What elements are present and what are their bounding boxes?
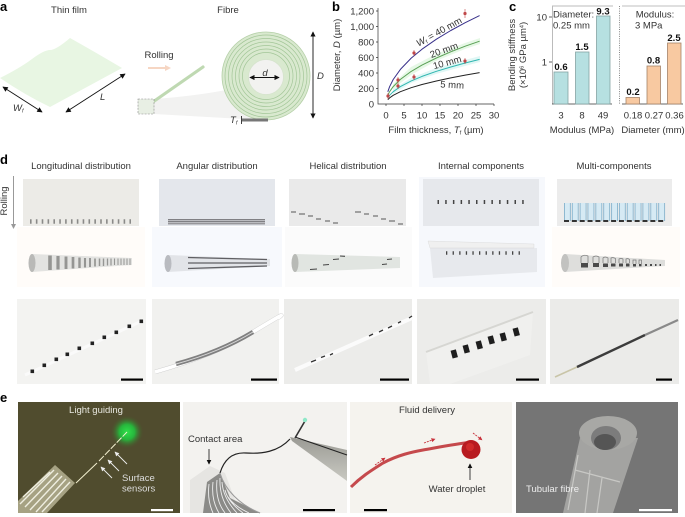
note: modulus: Modulus: [636, 10, 674, 20]
note: modulus: 3 MPa [635, 20, 663, 32]
teal x labels: 49 [598, 110, 608, 122]
rolling direction arrow [0, 176, 16, 229]
y ticks: 1 [542, 57, 547, 68]
column headings: Internal components [438, 161, 524, 172]
data markers [387, 9, 466, 99]
curve: 5 mm [388, 73, 480, 100]
x axis tick labels: 15 [435, 110, 445, 122]
schematic 4 bottom: partially rolled sheet [428, 241, 537, 278]
curve: 10 mm [388, 59, 480, 98]
x axis tick labels: 5 [401, 110, 407, 122]
y axis title: 4 [520, 25, 526, 28]
curve labels: 10 mm [432, 54, 463, 72]
photo 3: helical [284, 299, 412, 384]
schematic 2 top: angular sheet [159, 179, 275, 226]
arrow: inner diameter [250, 68, 279, 79]
photo: light guiding: Light guiding [69, 405, 123, 416]
arrow: film length [66, 74, 125, 112]
curve labels: = 40 mm [424, 15, 464, 44]
y axis tick labels: 1,200 [350, 6, 374, 17]
orange bar values: 0.2 [626, 87, 640, 98]
schematic 2 bottom: angular fibre [164, 255, 270, 272]
x axis title: f [460, 130, 462, 136]
photo: tubular fibre [516, 402, 678, 513]
arrow: film width [3, 87, 42, 114]
note: diameter [553, 10, 594, 32]
photo: light guiding: sensors [122, 484, 156, 494]
curve: 40 mm [388, 16, 480, 92]
note: diameter: Diameter: [553, 10, 594, 20]
y axis tick labels [350, 6, 374, 110]
rolling label and arrow: Rolling [144, 50, 174, 61]
y ticks: 10 [536, 12, 547, 23]
photo: contact area [183, 402, 347, 513]
fibre cross-section rings [222, 32, 310, 120]
orange x labels [621, 110, 685, 136]
teal x labels: Modulus (MPa) [550, 125, 614, 136]
teal x labels [550, 110, 614, 136]
orange bar values [626, 33, 681, 98]
y axis title: ) [518, 22, 529, 25]
curve labels: W [415, 35, 429, 49]
teal bar values: 1.5 [575, 42, 589, 53]
y axis tick labels: 600 [358, 53, 374, 64]
curve labels: f [425, 39, 430, 45]
orange x labels: 0.36 [665, 110, 684, 122]
x axis title: Film thickness, T [388, 125, 460, 136]
rolled fibre [150, 67, 203, 104]
curve labels: 5 mm [440, 79, 464, 92]
column headings: Multi-components [577, 161, 652, 172]
curve labels [415, 15, 464, 92]
y axis title: Diameter, D (µm) [332, 19, 343, 91]
schematic 5 bottom: multi-component fibre [561, 254, 665, 272]
teal bar values: 9.3 [596, 6, 610, 18]
column headings: Angular distribution [176, 161, 258, 172]
y axis title: 6 [520, 66, 526, 69]
orange x labels: Diameter (mm) [621, 125, 685, 136]
x axis title: (µm) [461, 125, 484, 136]
zoom projection wedge [154, 90, 262, 120]
panel e: applications [0, 390, 678, 513]
y axis tick labels: 200 [358, 84, 374, 95]
teal x labels: 8 [579, 110, 585, 122]
thin film sheet [0, 38, 122, 107]
teal bars [554, 16, 610, 104]
photo 5: multi-components [550, 299, 679, 384]
y axis title [507, 19, 529, 91]
curve band 20 mm [393, 38, 480, 89]
photo: tubular fibre: Tubular fibre [526, 484, 579, 495]
arrow: film width: W [13, 103, 22, 114]
frame right [622, 5, 685, 7]
dashed zoom box [138, 99, 154, 114]
column headings [31, 161, 652, 172]
rolling label and arrow [144, 50, 174, 71]
thickness marker: f [236, 120, 238, 126]
arrow: inner diameter: d [262, 68, 268, 79]
y axis tick labels: 1,000 [350, 22, 374, 33]
schematic 3 top: helical sheet [289, 179, 406, 226]
teal bar values [554, 6, 610, 73]
note: diameter: 0.25 mm [553, 20, 590, 32]
axes and ticks [376, 8, 494, 106]
column headings: Helical distribution [309, 161, 387, 172]
panel d: distribution designs [0, 152, 680, 384]
schematic 5 top: multi-component sheet [557, 179, 672, 226]
heading: fibre: Fibre [217, 5, 239, 16]
photo: fluid delivery: Fluid delivery [399, 405, 455, 416]
photo: light guiding [18, 402, 180, 513]
dotted divider [618, 6, 620, 104]
arrow: outer diameter [313, 32, 324, 118]
thickness marker [230, 115, 268, 126]
photo: light guiding: Surface [122, 473, 155, 484]
baseline left [552, 103, 612, 105]
photo: contact area: Contact area [188, 434, 243, 445]
panel c: bending stiffness bar charts [507, 0, 685, 136]
y ticks [536, 12, 552, 68]
orange bars [626, 43, 681, 104]
photo: fluid delivery [350, 402, 512, 513]
orange x labels: 0.18 [624, 110, 642, 122]
y axis tick labels: 400 [358, 68, 374, 79]
note: modulus [635, 10, 674, 32]
x axis tick labels: 0 [383, 110, 389, 122]
schematic 1 bottom: longitudinal fibre [28, 254, 132, 272]
photo 2: angular [152, 299, 281, 384]
y axis title: Bending stiffness [507, 19, 518, 91]
teal bar values: 0.6 [554, 62, 568, 73]
x axis tick labels: 25 [471, 110, 481, 122]
x axis tick labels [383, 110, 499, 122]
schematic 4 top: internal sheet [423, 179, 539, 226]
y axis tick labels: 800 [358, 37, 374, 48]
arrow: film length: L [100, 92, 105, 103]
panel label d: d [0, 152, 8, 167]
orange bar values: 0.8 [647, 56, 660, 66]
panel b: diameter vs film thickness chart [332, 0, 499, 136]
schematic 1 top: longitudinal sheet [23, 179, 139, 226]
curve labels: 20 mm [429, 40, 460, 61]
curve: 20 mm [388, 41, 480, 95]
thickness marker: T [230, 115, 236, 126]
column headings: Longitudinal distribution [31, 161, 131, 172]
photo 1: longitudinal [17, 299, 146, 384]
y axis title: GPa µm [518, 28, 529, 66]
panel a: film to fibre schematic [0, 0, 324, 126]
x axis tick labels: 10 [417, 110, 427, 122]
curve band 10 mm [393, 56, 480, 94]
arrow: film width: f [22, 108, 24, 114]
orange x labels: 0.27 [645, 110, 663, 122]
arrow: outer diameter: D [317, 71, 324, 82]
heading: thin film: Thin film [51, 5, 87, 16]
y axis tick labels: 0 [369, 99, 374, 110]
panel label e: e [0, 390, 7, 405]
x axis tick labels: 30 [489, 110, 499, 122]
schematic backgrounds [17, 177, 680, 287]
photo: fluid delivery: Water droplet [429, 484, 486, 495]
frame left [552, 6, 613, 104]
photo 4: internal [417, 299, 546, 384]
schematic 3 bottom: helical fibre [292, 254, 400, 272]
x axis tick labels: 20 [453, 110, 463, 122]
y axis title: (×10 [518, 69, 529, 88]
orange bar values: 2.5 [667, 33, 681, 44]
teal x labels: 3 [558, 110, 564, 122]
baseline right [622, 103, 683, 105]
